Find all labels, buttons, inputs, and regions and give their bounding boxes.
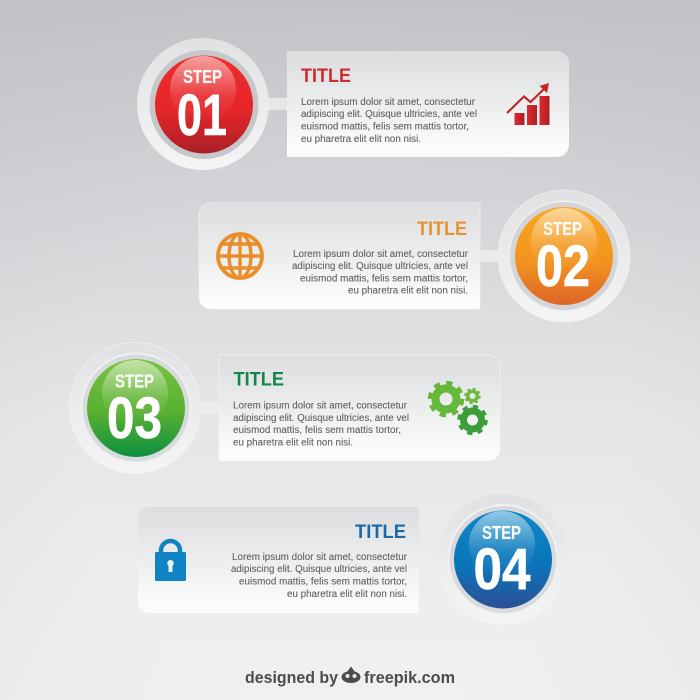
card 04 xyxy=(138,507,419,613)
text 03: Lorem ipsum dolor sit amet, consectetur xyxy=(233,400,408,412)
text 03: adipiscing elit. Quisque ultricies, ante vel xyxy=(233,413,409,424)
badge 03: STEP xyxy=(115,370,154,392)
badge 04: STEP xyxy=(482,522,521,543)
text 03: euismod mattis, felis sem mattis tortor, xyxy=(233,425,401,436)
text 01: euismod mattis, felis sem mattis tortor, xyxy=(301,122,469,132)
text 04: eu pharetra elit elit non nisi. xyxy=(287,589,407,600)
badge 01: STEP xyxy=(183,66,222,87)
text 02 xyxy=(292,249,469,296)
title 04: TITLE xyxy=(355,521,406,543)
badge 01 xyxy=(137,38,269,170)
title 03: TITLE xyxy=(234,368,284,390)
panel: step 02 xyxy=(199,190,630,322)
panel: step 01 xyxy=(137,38,569,170)
text 01: adipiscing elit. Quisque ultricies, ante vel xyxy=(301,109,477,120)
connector 02 xyxy=(478,250,506,262)
title 01: TITLE xyxy=(301,65,351,87)
badge 02: STEP xyxy=(543,218,582,239)
text 04: adipiscing elit. Quisque ultricies, ante vel xyxy=(231,564,407,575)
text 03 xyxy=(233,400,409,448)
text 02: euismod mattis, felis sem mattis tortor, xyxy=(300,274,468,284)
text 03: eu pharetra elit elit non nisi. xyxy=(233,438,353,448)
footer credit: designed by xyxy=(245,669,339,687)
badge 03: 03 xyxy=(107,386,162,451)
icon: globe xyxy=(218,233,262,279)
text 04 xyxy=(231,552,408,600)
badge 02 xyxy=(498,190,630,322)
badge 01: 01 xyxy=(177,83,227,148)
badge 02: 02 xyxy=(536,234,590,299)
text 02: adipiscing elit. Quisque ultricies, ante vel xyxy=(292,261,468,272)
text 01: Lorem ipsum dolor sit amet, consectetur xyxy=(301,97,476,108)
icon: gears xyxy=(430,384,486,433)
title 02: TITLE xyxy=(417,218,467,240)
footer credit xyxy=(245,666,455,687)
connector 03 xyxy=(194,402,222,414)
badge 04 xyxy=(438,494,568,625)
footer credit: freepik.com xyxy=(364,669,455,687)
connector 04 xyxy=(417,553,445,565)
text 02: eu pharetra elit elit non nisi. xyxy=(348,286,468,296)
card 01 xyxy=(287,51,569,157)
connector 01 xyxy=(262,98,290,110)
panel: step 04 xyxy=(138,494,568,625)
panel: step 03 xyxy=(70,342,500,474)
card 02 xyxy=(199,203,480,309)
icon: freepik logo xyxy=(342,666,360,683)
text 02: Lorem ipsum dolor sit amet, consectetur xyxy=(293,249,469,260)
card 03 xyxy=(219,355,500,461)
icon: growth chart xyxy=(507,83,550,125)
icon: padlock xyxy=(155,541,186,581)
text 04: euismod mattis, felis sem mattis tortor, xyxy=(239,576,407,588)
text 01: eu pharetra elit elit non nisi. xyxy=(301,134,421,145)
text 04: Lorem ipsum dolor sit amet, consectetur xyxy=(232,552,408,563)
text 01 xyxy=(301,97,477,145)
badge 04: 04 xyxy=(474,537,530,602)
badge 03 xyxy=(70,342,200,474)
